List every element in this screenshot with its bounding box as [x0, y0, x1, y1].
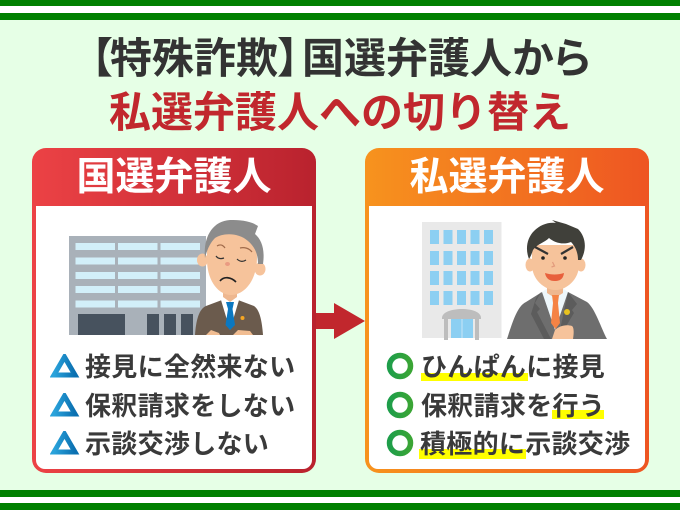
- icon: circle: [386, 352, 414, 380]
- item 3: [386, 429, 630, 459]
- text: 積極的に示談交渉: [420, 429, 630, 459]
- highlight: [552, 410, 604, 419]
- text: 保釈請求を行う: [421, 391, 605, 421]
- text: 保釈請求をしない: [85, 391, 295, 421]
- highlight: [419, 449, 526, 459]
- illustration: office tower and confident lawyer: [422, 220, 607, 340]
- item 2: [386, 391, 605, 421]
- item 1: [50, 352, 295, 382]
- list: 私選弁護人 benefits: [386, 352, 630, 459]
- title line 1: 】: [277, 35, 319, 82]
- icon: triangle: [50, 431, 80, 454]
- panel: 私選弁護人: [365, 148, 649, 473]
- text: ひんぱんに接見: [421, 352, 605, 382]
- icon: triangle: [50, 393, 80, 416]
- text: 示談交渉しない: [85, 429, 269, 459]
- panel heading: 私選弁護人: [409, 156, 604, 199]
- icon: circle: [386, 392, 414, 418]
- text: 接見に全然来ない: [85, 352, 295, 382]
- item 3: [50, 429, 269, 459]
- gray building: [69, 236, 206, 335]
- top stripes: [0, 0, 680, 20]
- panel heading: 国選弁護人: [76, 156, 272, 199]
- title line 1: 特殊詐欺: [110, 35, 278, 82]
- illustration: gray building and worried lawyer: [69, 220, 266, 335]
- item 2: [50, 391, 295, 421]
- bottom stripes: [0, 490, 680, 510]
- confident lawyer: [507, 220, 607, 339]
- icon: circle: [386, 430, 414, 456]
- title line 1: 国選弁護人から: [302, 35, 590, 82]
- arrow: [316, 303, 365, 339]
- office tower: [422, 222, 502, 340]
- panel: 国選弁護人: [32, 148, 316, 473]
- panel body: [36, 206, 312, 469]
- title line 1: [71, 35, 590, 82]
- highlight: [421, 373, 528, 381]
- icon: triangle: [50, 354, 80, 378]
- panel body: [369, 206, 645, 469]
- title line 1: 【: [71, 35, 113, 82]
- list: 国選弁護人 drawbacks: [50, 352, 295, 459]
- item 1: [386, 352, 605, 382]
- title line 2: 私選弁護人への切り替え: [109, 89, 571, 136]
- worried lawyer: [195, 220, 266, 335]
